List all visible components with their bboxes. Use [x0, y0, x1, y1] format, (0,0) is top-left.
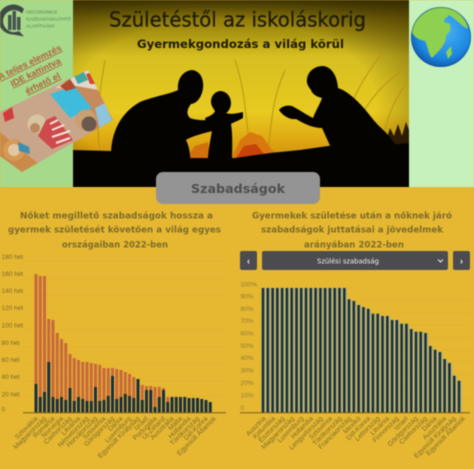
subtitle: Gyermekgondozás a világ körül [137, 37, 344, 51]
x axis country labels [13, 414, 218, 460]
y axis labels: 50% [240, 343, 254, 350]
chart: income replacement bars [240, 282, 470, 460]
x axis country labels: Izrael [393, 415, 410, 432]
x axis country labels: Luxemburg [104, 415, 133, 444]
x axis country labels: Egyesült Királyság [413, 415, 458, 460]
y axis labels [2, 254, 23, 414]
logo: Oeconomus [0, 5, 71, 36]
y axis labels: 160 hét [2, 271, 23, 278]
glow at horizon [232, 132, 285, 158]
x axis country labels: Csehország [43, 415, 74, 446]
x axis country labels: Egyesült Államok [175, 414, 218, 457]
x axis country labels: Portugália [132, 415, 159, 442]
x axis country labels: Málta [167, 415, 184, 432]
x axis country labels: Magyarország [261, 415, 296, 451]
x axis country labels: Szlovákia [14, 415, 40, 441]
control: previous button [240, 251, 257, 270]
chart title: benefits: szabadságok juttatásai a jövedelmek [261, 226, 444, 236]
x axis country labels: Dánia [107, 415, 125, 433]
chart title: benefits [252, 210, 452, 250]
chart title: leave duration: országaiban 2022-ben [62, 240, 168, 250]
control: next button [453, 251, 470, 270]
image: children playing collage [0, 70, 114, 172]
y axis labels: 0 [240, 405, 244, 412]
chart title: benefits: Gyermekek születése után a nőknek járó [252, 210, 452, 222]
y axis labels: 40% [240, 355, 254, 362]
logo: Oeconomus: GAZDASÁGKUTATÓ [26, 16, 71, 22]
x axis country labels: Törökország [169, 415, 201, 447]
control: dropdown [262, 251, 448, 270]
x axis country labels: Ausztrália [422, 415, 448, 442]
y axis labels: 90% [240, 294, 254, 300]
x axis country labels: Németország [57, 415, 91, 449]
logo: Oeconomus: ALAPÍTVÁNY [26, 22, 56, 28]
x axis country labels: Dél-Korea [183, 415, 210, 442]
x axis country labels: Finnország [372, 415, 401, 444]
y axis labels: 60% [240, 330, 254, 338]
x axis country labels: Szlovénia [82, 415, 108, 441]
x axis country labels: Csehország [398, 415, 429, 446]
x axis country labels: Hollandia [167, 415, 193, 440]
silhouette: child [205, 91, 243, 160]
y axis labels: 100% [240, 282, 257, 288]
chart title: benefits: arányában 2022-ben [304, 240, 404, 250]
link text: full analysis: IDE kattintva [9, 55, 63, 89]
x axis country labels: Franciaország [318, 415, 353, 451]
navy bars [263, 288, 459, 413]
x axis country labels: Észtország [256, 414, 287, 444]
orange bars: total leave [34, 274, 169, 413]
heading pill: Szabadságok [156, 172, 320, 204]
x axis country labels: Litvánia [369, 415, 391, 437]
title: Születéstől az iskoláskorig [109, 8, 366, 32]
x axis country labels: Luxemburg [276, 415, 306, 444]
panel: hero photo with silhouettes [73, 0, 409, 187]
silhouette: father [111, 70, 216, 170]
y axis labels: 100 hét [2, 322, 23, 330]
panel: right pale green strip [409, 0, 474, 187]
x axis country labels: Egyesült Államok [424, 414, 467, 457]
control: previous button: ‹ [247, 256, 250, 266]
y axis labels: 60 hét [2, 357, 20, 364]
pale bars [265, 288, 461, 413]
x axis country labels: Mexikó [342, 415, 363, 436]
x axis country labels: Szlovénia [308, 415, 334, 441]
control: next button: › [460, 256, 463, 266]
y axis labels: 70% [240, 318, 254, 325]
ground silhouette [73, 143, 409, 187]
x axis country labels: Magyarország [13, 415, 48, 451]
x axis country labels: Görögország [83, 415, 116, 448]
chart title: leave duration [8, 212, 221, 250]
x axis country labels: Dél-Korea [345, 415, 372, 442]
y axis labels: 0 [2, 406, 6, 414]
panel: left green strip [0, 0, 73, 187]
x axis country labels: Horvátország [65, 415, 99, 449]
x axis country labels: Görögország [387, 415, 420, 448]
heading pill: Szabadságok: Szabadságok [191, 181, 286, 196]
grass clumps on right [385, 122, 409, 150]
chart: leave duration stacked bars [2, 254, 226, 460]
control: dropdown: Szülési szabadság [317, 258, 379, 266]
chart title: leave duration: Nőket megillető szabadságok hossza a [20, 212, 213, 222]
y axis labels: 80 hét [2, 340, 20, 347]
icon: globe [411, 7, 471, 67]
y axis labels: 20% [240, 380, 254, 387]
logo: Oeconomus: OECONOMUS [26, 10, 57, 14]
grass blades [98, 50, 405, 150]
y axis labels: 10% [240, 392, 254, 400]
x axis country labels: Kolumbia [252, 415, 277, 440]
x axis country labels: Litvánia [60, 415, 82, 437]
x axis country labels: Egyesült Királyság [97, 415, 142, 460]
x axis country labels [245, 414, 467, 460]
x axis country labels: Lengyelország [288, 415, 325, 452]
y axis labels: 30% [240, 368, 254, 374]
x axis country labels: Izrael [133, 415, 150, 432]
x axis country labels: Románia [32, 415, 57, 440]
x axis country labels: Lettország [354, 415, 382, 443]
link text: full analysis: érhető el [24, 71, 62, 96]
y axis labels: 20 hét [2, 392, 20, 398]
x axis country labels: Dánia [421, 415, 439, 433]
y axis labels: 140 hét [2, 288, 23, 295]
y axis labels [240, 282, 257, 412]
x axis country labels: Új-Zéland [140, 414, 167, 441]
x axis country labels: Hollandia [290, 415, 315, 440]
y axis labels: 180 hét [2, 254, 23, 261]
chart title: leave duration: gyermek születését követően a világ egyes [8, 224, 221, 236]
y axis labels: 120 hét [2, 305, 23, 312]
x axis country labels: Norvégia [41, 415, 65, 440]
silhouette: mother [279, 66, 400, 150]
y axis labels: 40 hét [2, 374, 20, 381]
y axis labels: 80% [240, 306, 254, 313]
x axis country labels: Törökország [312, 415, 344, 447]
x axis country labels: Ausztrália [149, 415, 176, 442]
x axis country labels: Ausztria [245, 415, 268, 438]
navy bars: maternity leave [34, 362, 212, 413]
